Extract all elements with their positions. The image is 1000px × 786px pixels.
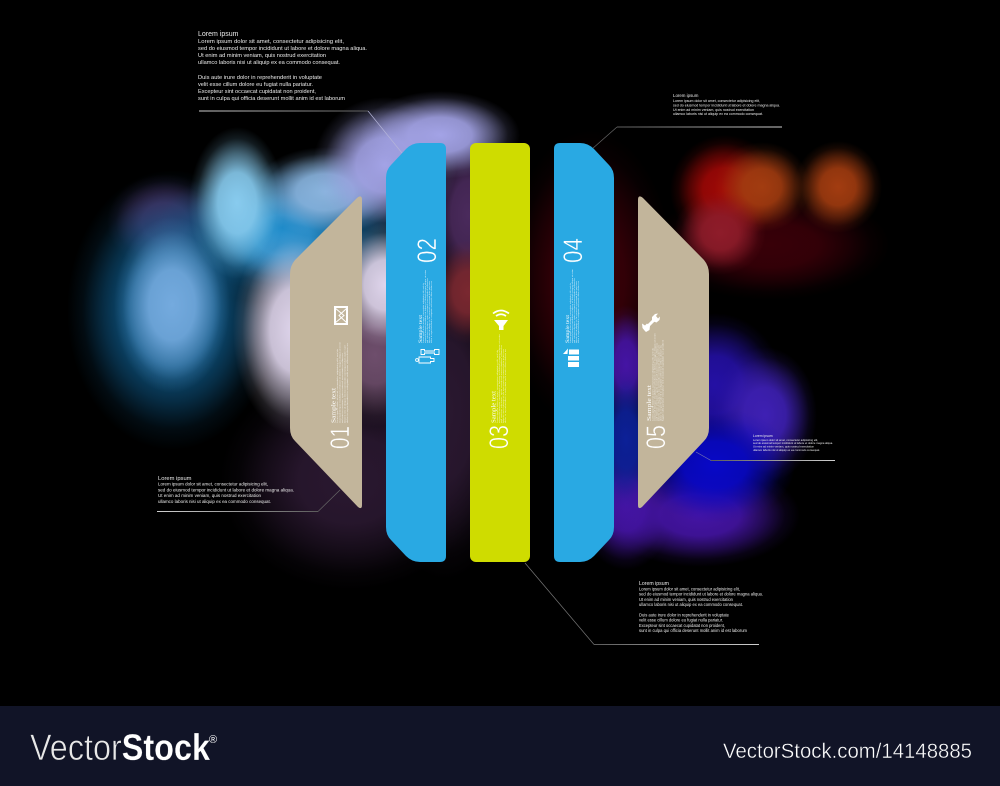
sample text body: Lorem ipsum dolor sit amet, consectetur adipisicing elit, sed do [496, 349, 499, 423]
leader line [696, 452, 835, 461]
sample text body: Lorem ipsum dolor sit amet, consectetur adipisicing elit, sed do [569, 282, 572, 343]
panel shape [638, 196, 709, 508]
callout text [673, 93, 780, 116]
number 03: 03 [484, 425, 514, 449]
sample text body: Lorem ipsum dolor sit amet, consectetur adipisicing elit, sed do [652, 347, 654, 421]
callout text [753, 434, 833, 452]
sample text body: laboris nisi ut aliquip ex ea commodo consequat duis aute irure [344, 344, 346, 423]
panel shape [554, 143, 614, 562]
sample text body: laboris nisi ut aliquip ex ea commodo consequat duis aute irure [575, 280, 578, 343]
sample text body [336, 342, 349, 423]
callout text: Duis aute irure dolor in reprehenderit in voluptate [639, 612, 730, 618]
sample text body: laboris nisi ut aliquip ex ea commodo consequat duis aute irure [658, 344, 660, 421]
sample text heading: Sample text [565, 314, 571, 343]
callout text: Lorem ipsum dolor sit amet, consectetur adipisicing elit, [158, 482, 268, 486]
callout text: sed do eiusmod tempor incididunt ut labore et dolore magna aliqua. [753, 441, 833, 445]
callout text [198, 31, 367, 102]
callout text: sed do eiusmod tempor incididunt ut labore et dolore magna aliqua. [198, 46, 367, 52]
sample text heading: Sample text [418, 314, 424, 343]
callout text: velit esse cillum dolore eu fugiat nulla pariatur. [198, 82, 313, 88]
panel 01: tan [290, 196, 362, 508]
callout text: Lorem ipsum [198, 31, 239, 38]
callout text: ullamco laboris nisi ut aliquip ex ea commodo consequat. [753, 448, 820, 452]
callout text: Ut enim ad minim veniam, quis nostrud exercitation [198, 53, 326, 59]
sample text body: eiusmod tempor incididunt ut labore et dolore magna aliqua ut enim [654, 333, 656, 421]
callout: left [157, 476, 340, 512]
callout text: Lorem ipsum dolor sit amet, consectetur adipisicing elit, [198, 39, 344, 45]
number 02: 02 [412, 238, 442, 263]
sample text body: eiusmod tempor incididunt ut labore et dolore magna aliqua ut enim [338, 342, 342, 423]
callout text: ullamco laboris nisi ut aliquip ex ea commodo consequat. [198, 60, 340, 66]
sample text body [652, 333, 664, 421]
sample text body [496, 334, 507, 423]
sample text body: eiusmod tempor incididunt ut labore et dolore magna aliqua ut enim [424, 270, 427, 343]
blurred colour backdrop [67, 91, 890, 590]
footer band [0, 706, 1000, 786]
sample text body: Lorem ipsum dolor sit amet, consectetur adipisicing elit, sed do [336, 348, 339, 423]
footer background [0, 706, 1000, 786]
callout text: Ut enim ad minim veniam, quis nostrud exercitation [673, 108, 754, 112]
callout: right [696, 434, 835, 461]
sample text body: Lorem ipsum dolor sit amet, consectetur adipisicing elit, sed do [422, 282, 425, 343]
callout text: ullamco laboris nisi ut aliquip ex ea commodo consequat. [158, 499, 271, 504]
leader line [592, 126, 782, 149]
callout: top right [592, 93, 782, 149]
leader line [157, 490, 340, 512]
sample text body: laboris nisi ut aliquip ex ea commodo consequat duis aute irure [502, 348, 505, 423]
icon: people [416, 350, 439, 363]
callout text: sunt in culpa qui officia deserunt mollit anim id est laborum [198, 96, 345, 102]
leader line [199, 110, 402, 153]
panel 03: lime [470, 143, 530, 562]
sample text heading: Sample text [646, 385, 653, 421]
panel 04: blue [554, 143, 614, 562]
number 01: 01 [325, 426, 355, 449]
callout text: sed do eiusmod tempor incididunt ut labore et dolore magna aliqua. [673, 103, 780, 107]
icon: envelope [335, 307, 347, 324]
callout text: velit esse cillum dolore eu fugiat nulla pariatur. [639, 618, 723, 623]
panel 05: tan [638, 196, 709, 508]
sample text body: laboris nisi ut aliquip ex ea commodo consequat duis aute irure [428, 280, 431, 343]
logo: VectorStock: VectorStock [30, 727, 210, 768]
sample text body: ad minim veniam, quis nostrud exercitation ullamco [426, 277, 429, 343]
callout text: Lorem ipsum [639, 581, 669, 587]
callout text [639, 581, 763, 633]
sample text body: dolor in reprehenderit in voluptate velit esse cillum dolore eu [577, 280, 580, 343]
callout text: sed do eiusmod tempor incididunt ut labore et dolore magna aliqua. [639, 592, 763, 597]
callout text: ullamco laboris nisi ut aliquip ex ea commodo consequat. [673, 112, 763, 116]
sample text body: ad minim veniam, quis nostrud exercitation ullamco [500, 344, 503, 423]
sample text body: dolor in reprehenderit in voluptate velit esse cillum dolore eu [660, 344, 662, 421]
sample text body: dolor in reprehenderit in voluptate velit esse cillum dolore eu [430, 280, 433, 343]
sample text body: dolor in reprehenderit in voluptate velit esse cillum dolore eu [346, 342, 349, 423]
callout text: sunt in culpa qui officia deserunt mollit anim id est laborum [639, 628, 748, 633]
callout text: Ut enim ad minim veniam, quis nostrud exercitation [158, 493, 261, 498]
sample text heading: Sample text [330, 388, 338, 423]
callout text: Lorem ipsum [158, 476, 192, 482]
number 04: 04 [558, 238, 588, 263]
panel 02: blue [386, 143, 446, 562]
callout text: Excepteur sint occaecat cupidatat non proident, [639, 623, 725, 628]
callout text: Lorem ipsum dolor sit amet, consectetur adipisicing elit, [753, 438, 818, 442]
callout text: Lorem ipsum dolor sit amet, consectetur adipisicing elit, [639, 586, 740, 592]
sample text heading: Sample text [492, 391, 498, 423]
image id: VectorStock.com/14148885 [723, 740, 972, 763]
icon: speaker [493, 310, 509, 330]
sample text body: eiusmod tempor incididunt ut labore et dolore magna aliqua ut enim [571, 269, 574, 343]
sample text body: eiusmod tempor incididunt ut labore et dolore magna aliqua ut enim [498, 334, 501, 423]
sample text body: ad minim veniam, quis nostrud exercitation ullamco [573, 277, 576, 343]
panel shape [470, 143, 530, 562]
sample text body: ad minim veniam, quis nostrud exercitation ullamco [341, 352, 344, 423]
sample text body [422, 270, 433, 343]
callout text: Duis aute irure dolor in reprehenderit in voluptate [198, 75, 322, 81]
sample text body: fugiat nulla pariatur excepteur sint occaecat cupidatat non proident [662, 339, 664, 421]
panel shape [386, 143, 446, 562]
callout text: Ut enim ad minim veniam, quis nostrud exercitation [753, 445, 814, 449]
panel shape [290, 196, 362, 508]
leader line [525, 563, 759, 645]
icon: bars [563, 348, 579, 367]
callout: top left [198, 31, 402, 153]
callout text: Lorem ipsum dolor sit amet, consectetur adipisicing elit, [673, 99, 760, 103]
callout text [158, 476, 294, 504]
sample text body [569, 269, 580, 343]
callout: bottom right [525, 563, 763, 645]
icon: wrench [642, 314, 660, 332]
callout text: ullamco laboris nisi ut aliquip ex ea commodo consequat. [639, 602, 743, 607]
callout text: Lorem ipsum [673, 93, 699, 98]
logo: VectorStock: ® [209, 734, 217, 746]
callout text: Ut enim ad minim veniam, quis nostrud exercitation [639, 597, 734, 602]
number 05: 05 [641, 425, 671, 449]
sample text body: ad minim veniam, quis nostrud exercitation ullamco [656, 342, 658, 421]
callout text: Excepteur sint occaecat cupidatat non proident, [198, 89, 316, 95]
callout text: Lorem ipsum [753, 434, 773, 438]
callout text: sed do eiusmod tempor incididunt ut labore et dolore magna aliqua. [158, 487, 294, 492]
sample text body: dolor in reprehenderit in voluptate velit esse cillum dolore eu [504, 348, 507, 423]
